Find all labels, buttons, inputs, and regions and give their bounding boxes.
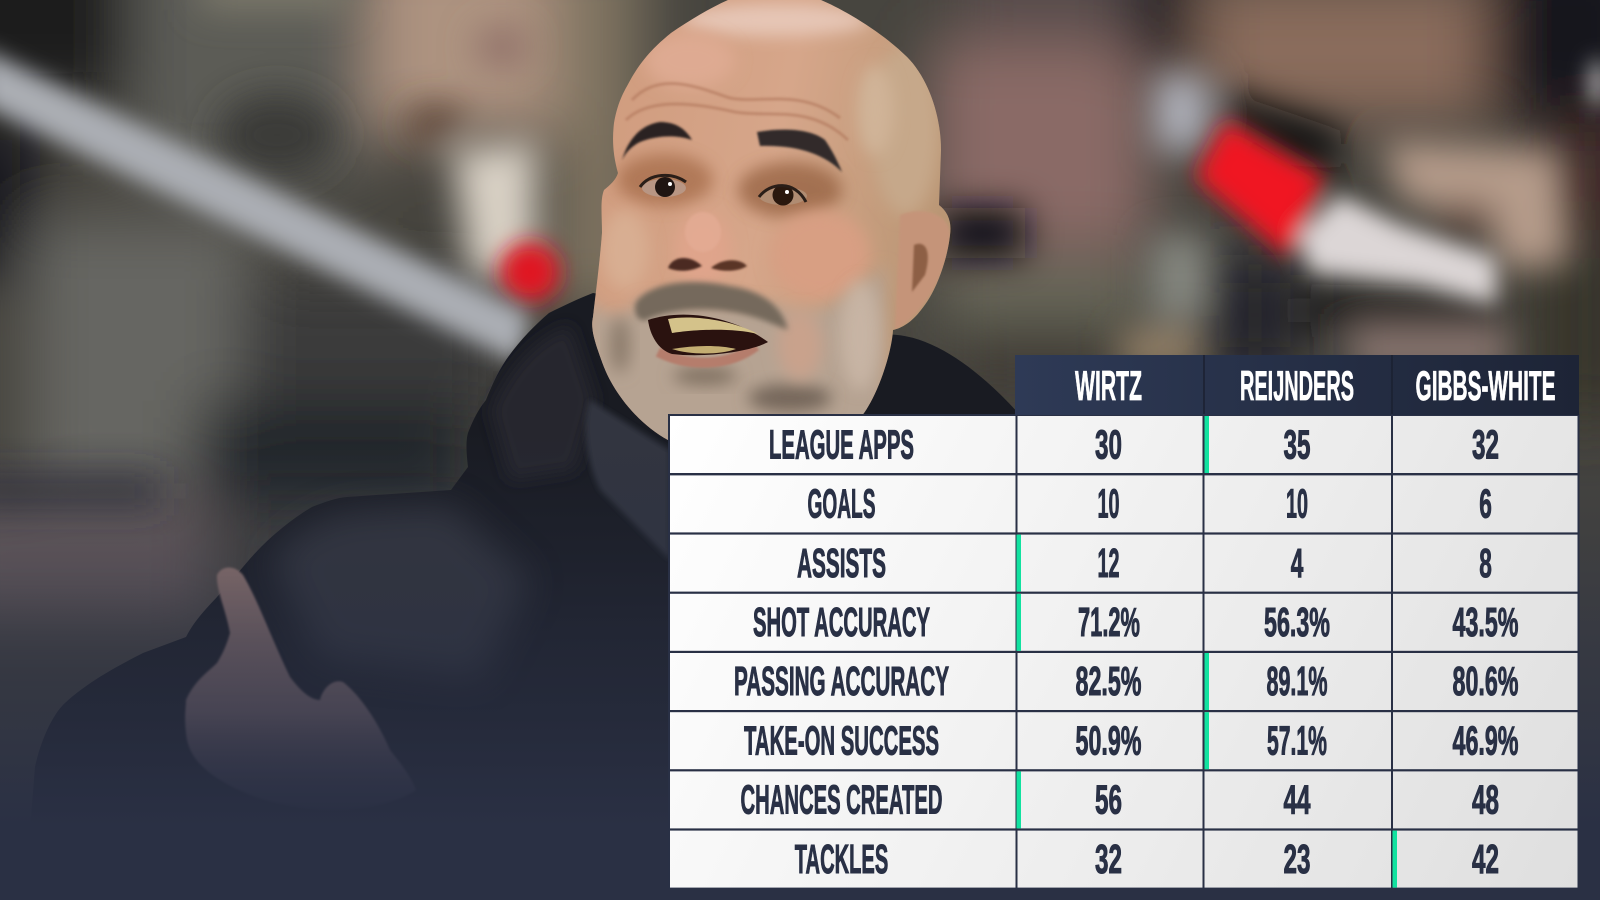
header row: WIRTZ xyxy=(1075,362,1142,409)
row: shot accuracy: 71.2% xyxy=(1078,599,1140,645)
moustache xyxy=(635,282,788,330)
row: league apps: 32 xyxy=(1472,421,1499,467)
row: goals xyxy=(670,475,1578,532)
collar sheen xyxy=(490,325,595,480)
header row xyxy=(1015,355,1579,415)
eye shadow areas xyxy=(617,154,713,206)
row: shot accuracy: SHOT ACCURACY xyxy=(753,599,930,645)
row: league apps: 30 xyxy=(1095,421,1122,467)
forehead wrinkles xyxy=(626,83,848,140)
row: shot accuracy: 56.3% xyxy=(1264,599,1330,645)
row: assists: 4 xyxy=(1291,540,1303,586)
stats table xyxy=(668,355,1580,890)
row: shot accuracy: 43.5% xyxy=(1452,599,1518,645)
railing band xyxy=(0,48,530,364)
row: tackles: 42 xyxy=(1472,836,1499,882)
row: take-on success: 57.1% xyxy=(1267,717,1327,763)
row: assists: 8 xyxy=(1479,540,1492,586)
right eye xyxy=(759,184,807,206)
mouth xyxy=(648,315,768,355)
row: assists: 12 xyxy=(1098,540,1120,586)
row: assists: ASSISTS xyxy=(797,540,886,586)
ear xyxy=(895,211,950,330)
row: league apps: LEAGUE APPS xyxy=(769,421,914,467)
scalp highlight xyxy=(680,4,870,36)
lower lip xyxy=(658,346,756,363)
row: goals: 10 xyxy=(1098,481,1120,527)
row: take-on success: 50.9% xyxy=(1076,717,1142,763)
row: tackles: 32 xyxy=(1095,836,1122,882)
head xyxy=(592,0,950,440)
row: shot accuracy xyxy=(670,594,1578,651)
hand xyxy=(185,568,416,809)
row: tackles: 23 xyxy=(1284,836,1310,882)
row: take-on success: TAKE-ON SUCCESS xyxy=(744,717,939,763)
left eye xyxy=(640,175,686,197)
row: passing accuracy xyxy=(670,653,1578,710)
row: take-on success: 46.9% xyxy=(1452,717,1518,763)
row: tackles xyxy=(670,831,1578,888)
row: take-on success xyxy=(670,712,1578,769)
row: league apps xyxy=(670,416,1578,473)
header row: REIJNDERS xyxy=(1240,362,1354,409)
right eyebrow xyxy=(757,130,842,172)
row: passing accuracy: 89.1% xyxy=(1266,658,1328,704)
row: chances created: 44 xyxy=(1284,777,1311,823)
row: goals: 10 xyxy=(1286,481,1308,527)
photo fade to navy xyxy=(0,430,1600,830)
row: passing accuracy: PASSING ACCURACY xyxy=(734,658,949,704)
row: assists xyxy=(670,535,1578,592)
temple side xyxy=(871,45,939,215)
row: tackles: TACKLES xyxy=(795,836,888,882)
row: chances created: 48 xyxy=(1472,777,1499,823)
row: goals: 6 xyxy=(1479,481,1492,527)
row: chances created xyxy=(670,771,1578,828)
jacket xyxy=(30,293,1020,900)
row: chances created: 56 xyxy=(1095,777,1122,823)
left eyebrow xyxy=(622,122,692,160)
row: league apps: 35 xyxy=(1284,421,1310,467)
beard stubble xyxy=(592,272,891,440)
nose xyxy=(668,212,747,271)
row: chances created: CHANCES CREATED xyxy=(740,777,942,823)
row: passing accuracy: 80.6% xyxy=(1452,658,1518,704)
row: passing accuracy: 82.5% xyxy=(1076,658,1142,704)
row: goals: GOALS xyxy=(808,481,876,527)
manager figure xyxy=(38,0,1015,758)
shoulder sheen xyxy=(270,505,530,680)
